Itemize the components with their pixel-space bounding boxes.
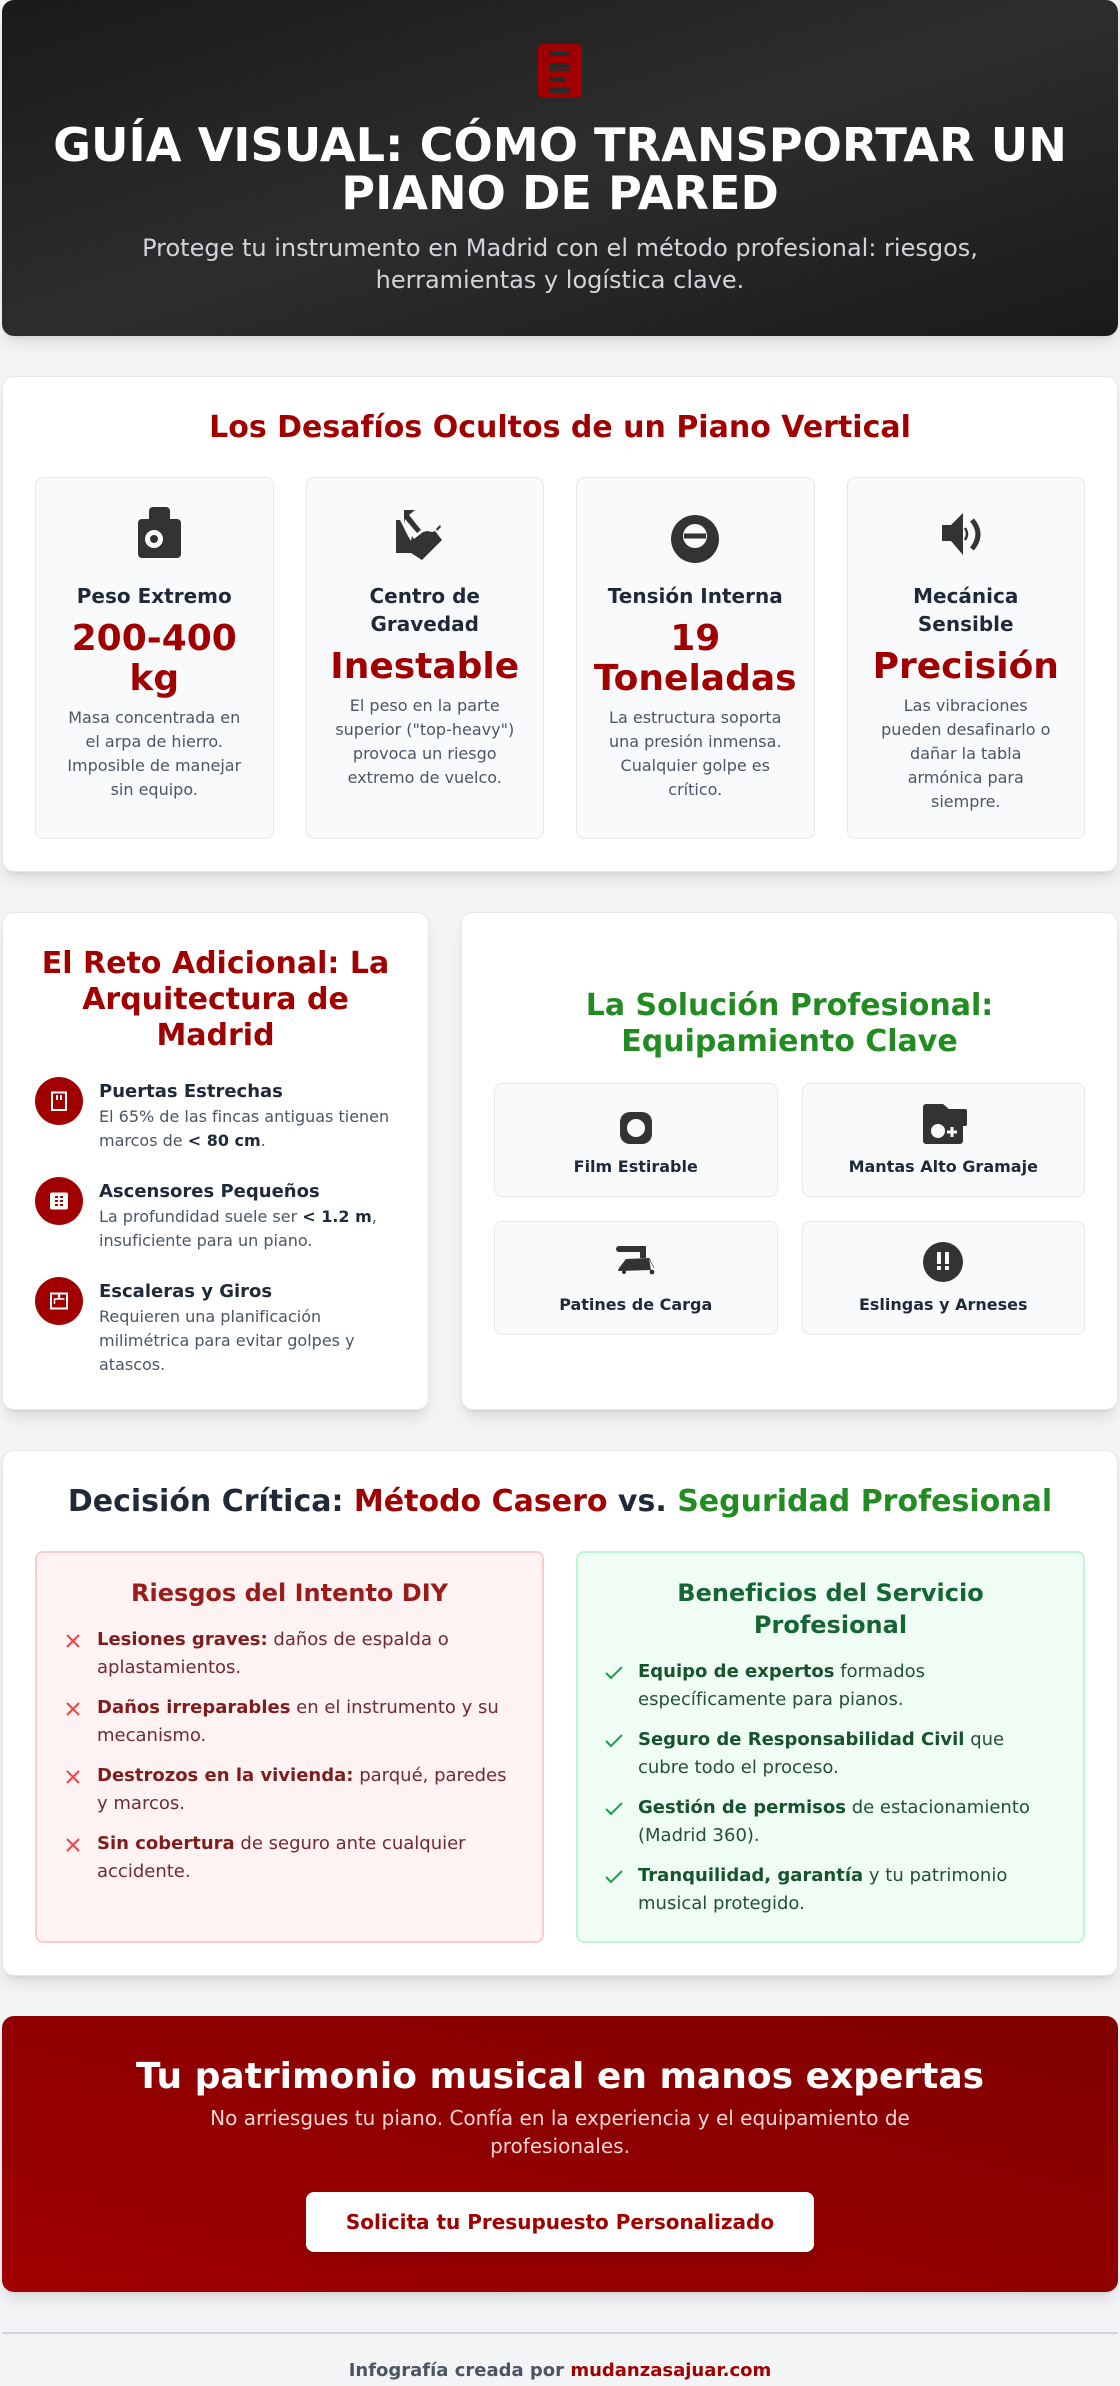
card: internal tension: 19 Toneladas [594,618,797,699]
risk: no insurance: Sin cobertura de seguro ante cualquier accidente. [97,1833,466,1882]
benefit: experts: Equipo de expertos formados específicamente para pianos. [638,1661,925,1710]
CTA text [210,2106,910,2158]
panel: critical decision [2,1450,1118,1976]
icon: check [605,1802,623,1816]
card: extreme weight: kg [129,658,179,699]
panel: professional benefits [576,1551,1085,1943]
tool: stretch film [494,1083,778,1197]
card: extreme weight: Peso Extremo [77,584,232,608]
footer [2,2332,1118,2386]
risk: instrument damage: Daños irreparables en el instrumento y su mecanismo. [97,1697,499,1746]
card: sensitive mechanics [846,477,1085,839]
heading: professional solution: La Solución Profesional: [586,988,993,1023]
icon: dolly [616,1246,654,1274]
title: PIANO DE PARED [341,166,779,220]
tool: load skates: Patines de Carga [559,1295,712,1314]
card: sensitive mechanics: Mecánica Sensible [913,584,1018,636]
icon: door [35,1077,83,1125]
item: small lifts: Ascensores Pequeños [99,1181,320,1202]
card: centre of gravity [306,477,544,839]
item: stairs and turns [35,1277,355,1374]
item: stairs and turns: Escaleras y Giros [99,1281,272,1302]
card: internal tension: Tensión Interna [608,584,783,608]
icon: check [605,1870,623,1884]
card: centre of gravity: Inestable [330,646,519,687]
card: extreme weight: Masa concentrada en el arpa de hierro. Imposible de manejar sin equipo. [67,708,241,799]
icon: cross [66,1634,80,1648]
card: internal tension: La estructura soporta una presión inmensa. Cualquier golpe es crítico. [609,708,782,799]
heading: hidden challenges: Los Desafíos Ocultos de un Piano Vertical [209,410,911,445]
CTA button [306,2192,814,2252]
CTA heading: Tu patrimonio musical en manos expertas [136,2056,984,2097]
heading: DIY risks: Riesgos del Intento DIY [131,1579,448,1607]
heading: Madrid architecture: El Reto Adicional: La Arquitectura de Madrid [42,946,389,1053]
icon: upright piano [538,44,582,98]
benefit: permits: Gestión de permisos de estacionamiento (Madrid 360). [638,1797,1030,1846]
heading: professional solution [586,988,993,1059]
icon: speaker [942,513,981,555]
panel: professional solution [461,912,1118,1410]
icon: lift [35,1177,83,1225]
title: GUÍA VISUAL: CÓMO TRANSPORTAR UN [53,118,1067,172]
tool: slings [802,1221,1085,1335]
CTA text: No arriesgues tu piano. Confía en la experiencia y el equipamiento de [210,2106,910,2130]
subtitle: herramientas y logística clave. [376,266,744,294]
icon: check [605,1734,623,1748]
panel: Madrid architecture [2,912,429,1410]
card: centre of gravity: Centro de Gravedad [370,584,480,636]
icon: tipping piano [396,510,442,560]
title [53,118,1067,220]
icon: cross [66,1770,80,1784]
heading: critical decision: Decisión Crítica: Método Casero vs. Seguridad Profesional [68,1484,1052,1519]
footer: Infografía creada por mudanzasajuar.com [349,2360,771,2381]
card: sensitive mechanics: Las vibraciones pueden desafinarlo o dañar la tabla armónica para siempre. [881,696,1050,811]
panel: DIY risks [35,1551,544,1943]
item: small lifts [35,1177,377,1250]
subtitle [142,234,978,294]
benefit: peace of mind: Tranquilidad, garantía y tu patrimonio musical protegido. [638,1865,1007,1914]
icon: harness [923,1242,963,1282]
item: narrow doors: El 65% de las fincas antiguas tienen marcos de < 80 cm. [99,1107,389,1150]
item: small lifts: La profundidad suele ser < 1.2 m, insuficiente para un piano. [99,1207,377,1250]
tool: load skates [494,1221,778,1335]
call to action [2,2016,1118,2292]
icon: cross [66,1838,80,1852]
risk: injuries: Lesiones graves: daños de espalda o aplastamientos. [97,1629,449,1678]
icon: stairs [35,1277,83,1325]
icon: blanket [923,1104,967,1144]
tool: heavy blankets [802,1083,1085,1197]
icon: weight [138,507,181,558]
item: narrow doors: Puertas Estrechas [99,1081,283,1102]
item: stairs and turns: Requieren una planificación milimétrica para evitar golpes y atascos. [99,1307,355,1374]
card: sensitive mechanics: Precisión [873,646,1059,687]
card: extreme weight [35,477,274,839]
icon: tension gauge [671,515,719,563]
challenge cards grid [35,477,1085,839]
subtitle: Protege tu instrumento en Madrid con el método profesional: riesgos, [142,234,978,262]
tool: stretch film: Film Estirable [574,1157,698,1176]
panel: hidden challenges [2,376,1118,872]
heading: professional benefits: Beneficios del Servicio Profesional [677,1579,984,1639]
CTA button: Solicita tu Presupuesto Personalizado [346,2210,774,2234]
header banner [2,0,1118,336]
equipment grid [494,1083,1085,1335]
benefit: insurance: Seguro de Responsabilidad Civil que cubre todo el proceso. [638,1729,1004,1778]
card: extreme weight: 200-400 [72,618,237,659]
risk: home damage: Destrozos en la vivienda: parqué, paredes y marcos. [97,1765,506,1814]
card: centre of gravity: El peso en la parte superior ("top-heavy") provoca un riesgo extremo de vuelco. [335,696,514,787]
comparison grid [35,1551,1085,1943]
icon: check [605,1666,623,1680]
CTA text: profesionales. [490,2134,630,2158]
icon: film roll [620,1112,652,1144]
heading: professional solution: Equipamiento Clave [621,1024,958,1059]
card: internal tension [576,477,814,839]
item: narrow doors [35,1077,389,1150]
tool: slings: Eslingas y Arneses [859,1295,1028,1314]
tool: heavy blankets: Mantas Alto Gramaje [849,1157,1038,1176]
icon: cross [66,1702,80,1716]
